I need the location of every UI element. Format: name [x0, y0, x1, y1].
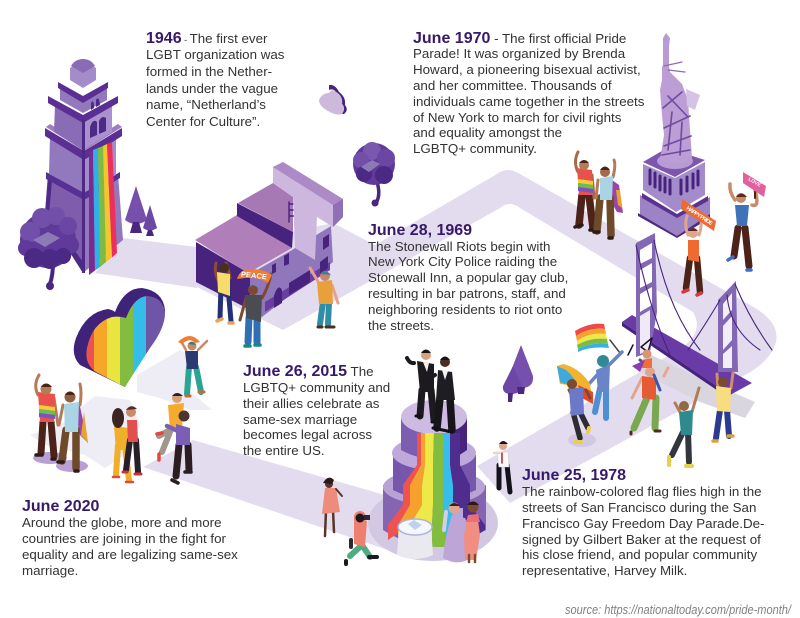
- groom right: [433, 356, 455, 432]
- rainbow flag: [575, 324, 620, 353]
- pedestal top: [643, 148, 705, 177]
- heading and text: june 2020: countries are joining in the fight for: [22, 531, 227, 546]
- icon: tree left of tower: [18, 207, 79, 290]
- heading and text: june 28 1969: resulting in bar patrons, staff, and: [368, 286, 566, 301]
- heading and text: june 25 1978: his close friend, and popular community: [522, 547, 757, 562]
- heading and text: june 26 2015: same-sex marriage: [243, 412, 357, 427]
- tower middle stage: [49, 137, 83, 192]
- group: protesters with signs: [681, 172, 766, 295]
- icon: small cone trees near tower: [125, 186, 157, 236]
- group: embracing pair: [157, 393, 191, 483]
- heading and text: june 25 1978: Francisco Gay Freedom Day Parade.De-: [522, 516, 765, 531]
- pedestal base: [640, 195, 710, 237]
- heading and text: june 28 1969: June 28, 1969: [368, 222, 472, 239]
- fire escape: [289, 202, 295, 222]
- heading and text: june 28 1969: the streets.: [368, 318, 434, 333]
- timeline path: [95, 170, 776, 549]
- group: couple at statue: [575, 152, 623, 238]
- marcher: blue outfit: [588, 352, 622, 418]
- person: kneeling photographer: [346, 511, 377, 564]
- heading and text: june 1970: Parade! It was organized by Brenda: [413, 46, 626, 61]
- building lower roof: [195, 215, 292, 273]
- building left wall: [196, 242, 262, 316]
- heading and text: june 2020: equality and are legalizing same-sex: [22, 547, 238, 562]
- heading and text: 1946: formed in the Nether-: [146, 64, 272, 79]
- groom left: [407, 350, 437, 422]
- shadow around cake: [368, 485, 498, 561]
- lifted man: [157, 393, 184, 460]
- heading and text: june 2020: Around the globe, more and more: [22, 515, 222, 530]
- icon: table with cloth: [397, 519, 433, 559]
- bridge cables: [636, 240, 772, 355]
- heading and text: june 1970: individuals came together in the streets: [413, 94, 645, 109]
- icon: rainbow heart: [74, 288, 165, 387]
- heading and text: june 26 2015: June 26, 2015 The: [243, 363, 374, 380]
- tower top stage: [48, 96, 118, 123]
- heading and text: june 25 1978: The rainbow-colored flag flies high in the: [522, 484, 762, 499]
- pedestal columns: [650, 170, 698, 194]
- group: brides: [443, 502, 480, 562]
- heading and text: june 26 2015: the entire US.: [243, 443, 325, 458]
- icon: statue of liberty: [638, 33, 710, 238]
- shadow under bridge: [640, 352, 755, 418]
- heading and text: june 26 2015: LGBTQ+ community and: [243, 380, 390, 395]
- group: june 2020 couple: [33, 375, 88, 472]
- tower upper stage: [54, 105, 83, 150]
- marcher: parent with child: [631, 350, 668, 434]
- cake top tier: [401, 418, 467, 459]
- bridge scaffold: [628, 338, 652, 355]
- man with cape: [58, 384, 88, 471]
- man in rainbow shirt: [575, 152, 594, 230]
- heading and text: june 28 1969: New York City Police raiding the: [368, 254, 557, 269]
- heading and text: june 1970: and equality amongst the: [413, 125, 562, 140]
- protester: yellow shirt: [215, 263, 233, 323]
- large letter block: [273, 162, 343, 260]
- heading and text: june 28 1969: neighboring residents to riot onto: [368, 302, 562, 317]
- bride in pink: [464, 502, 480, 562]
- cake middle tier: [393, 455, 476, 500]
- heading and text: june 28 1969: The Stonewall Riots begin with: [368, 239, 550, 254]
- rainbow icing: [388, 433, 485, 547]
- icon: cone tree near cake: [503, 345, 533, 402]
- group: banner carrier: [178, 336, 207, 396]
- protester: orange shirt: [310, 268, 338, 327]
- heading and text: june 25 1978: June 25, 1978: [522, 467, 626, 484]
- tower lower stage: [45, 173, 83, 273]
- heading and text: june 1970: Howard, a pioneering bisexual activist,: [413, 62, 641, 77]
- heading and text: june 1970: and her committee. Thousands of: [413, 78, 612, 93]
- tower battlement: [45, 128, 122, 160]
- heading and text: 1946: name, “Netherland’s: [146, 97, 266, 112]
- heading and text: 1946: Center for Culture”.: [146, 114, 260, 129]
- heading and text: june 25 1978: streets of San Francisco during the San: [522, 500, 756, 515]
- marcher: rainbow cape: [557, 364, 596, 447]
- icon: cloud: [319, 85, 347, 115]
- building upper wall: [237, 203, 293, 248]
- man with cape: [594, 160, 623, 238]
- bridge left tower: [636, 233, 657, 357]
- group: stonewall protesters: [215, 263, 338, 346]
- heading and text: june 1970: LGBTQ+ community.: [413, 141, 537, 156]
- man in rainbow shirt: [36, 375, 58, 459]
- statue body: [660, 66, 692, 164]
- group: grooms on cake: [407, 350, 455, 432]
- heading and text: june 28 1969: Stonewall Inn, a popular gay club,: [368, 270, 568, 285]
- love pride sign: LOVE: [747, 177, 762, 189]
- heading and text: june 1970: of New York to march for civil rights: [413, 110, 622, 125]
- heading and text: june 26 2015: becomes legal across: [243, 427, 372, 442]
- icon: stonewall building: [195, 162, 343, 317]
- person: man in white shirt: [494, 441, 510, 492]
- heading and text: 1946: 1946 - The first ever: [146, 30, 267, 47]
- heading and text: june 25 1978: signed by Gilbert Baker at the request of: [522, 532, 761, 547]
- icon: golden gate bridge: [622, 233, 772, 399]
- protester: blue tank: [728, 184, 757, 270]
- icon: wedding cake: [383, 400, 486, 547]
- protester: peace banner: [240, 274, 271, 346]
- heading and text: june 2020: marriage.: [22, 563, 78, 578]
- heading and text: june 1970: June 1970 - The first official Pride: [413, 30, 626, 47]
- heading and text: june 25 1978: representative, Harvey Milk.: [522, 563, 687, 578]
- group: hugging women: [112, 406, 141, 482]
- happy pride sign: HAPPY PRIDE: [685, 206, 714, 227]
- marcher: teal shirt: [669, 388, 699, 466]
- marcher: yellow shirt: [713, 373, 733, 441]
- icon: tree near building: [353, 142, 395, 206]
- building upper roof: [238, 183, 293, 232]
- cake bottom tier: [383, 485, 486, 546]
- rainbow banner: [89, 142, 117, 275]
- protester: orange tank: [683, 213, 701, 295]
- woman in yellow: [112, 408, 133, 482]
- heading and text: june 2020: June 2020: [22, 498, 99, 515]
- peace banner: PEACE: [241, 270, 267, 281]
- bridge deck: [622, 315, 752, 395]
- woman in red: [123, 406, 141, 474]
- person: woman in pink dress: [322, 478, 342, 536]
- heading and text: june 26 2015: their allies celebrate as: [243, 396, 380, 411]
- bridge right tower: [718, 281, 738, 372]
- building windows: [272, 234, 329, 308]
- icon: rainbow tower: [45, 59, 123, 275]
- group: flag parade: [557, 324, 733, 466]
- heading and text: 1946: LGBT organization was: [146, 47, 285, 62]
- heart stripes: [86, 330, 94, 370]
- building front wall: [250, 226, 333, 317]
- bride in purple: [443, 502, 476, 562]
- man in purple shirt: [167, 410, 191, 483]
- heading and text: 1946: lands under the vague: [146, 81, 278, 96]
- world map backdrop: [30, 350, 212, 468]
